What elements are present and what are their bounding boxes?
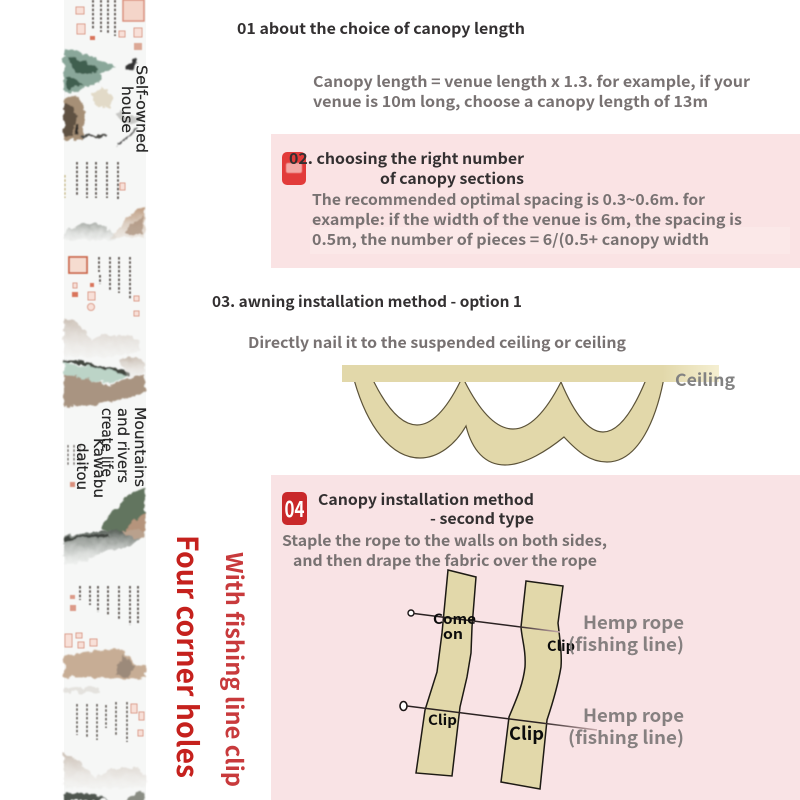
heading 04: Canopy installation method <box>318 489 534 510</box>
body text 01: Canopy length = venue length x 1.3. for example, if your <box>313 71 750 92</box>
rotated label: mountains and rivers: Kawabu <box>90 438 108 498</box>
label: hemp rope upper: (fishing line) <box>568 631 684 657</box>
mountain range 2 <box>64 317 145 407</box>
label: ceiling: Ceiling <box>675 366 735 391</box>
icon: red badge 04: 04 <box>284 492 305 524</box>
body text 01: venue is 10m long, choose a canopy length of 13m <box>313 91 708 112</box>
body text 02 <box>312 189 742 250</box>
label: clip lower left: Clip <box>428 710 457 730</box>
label: hemp rope lower: Hemp rope <box>583 702 684 728</box>
calligraphy block 2 <box>65 162 125 200</box>
rotated label: mountains and rivers: Mountains <box>131 407 149 487</box>
calligraphy block 4 <box>68 445 80 487</box>
rotated heading: four corner holes: Four corner holes <box>168 535 210 778</box>
section 01: canopy length <box>237 18 750 112</box>
calligraphy block 6 with seals <box>77 702 144 742</box>
label: hemp rope upper <box>568 609 684 657</box>
body text 04 <box>282 530 607 571</box>
rotated label: self-owned house <box>118 65 150 153</box>
body text 02: 0.5m, the number of pieces = 6/(0.5+ canopy width <box>312 229 709 250</box>
heading 02 <box>289 148 524 189</box>
label: hemp rope upper: Hemp rope <box>583 609 684 635</box>
panel: section 04 installation second type <box>271 475 800 800</box>
heading 04: - second type <box>430 508 534 529</box>
body text 01 <box>313 71 750 112</box>
mountain range 5 <box>64 752 145 800</box>
panel: painted landscape scroll strip <box>64 0 146 800</box>
pine tree, rock and pavilion <box>64 48 140 144</box>
icon: red badge 02 <box>282 152 306 185</box>
body text 02: example: if the width of the venue is 6m, the spacing is <box>312 209 742 230</box>
diagram: ceiling bar with scalloped canopy <box>342 365 735 465</box>
calligraphy block 5 with seals <box>65 586 138 648</box>
heading 02: 02. choosing the right number <box>289 148 524 169</box>
rotated label: mountains and rivers: create life <box>98 408 116 477</box>
rotated label: self-owned house: house <box>118 86 136 133</box>
diagram: upper rope line <box>408 610 560 632</box>
calligraphy block 3 with seals <box>69 257 139 316</box>
rotated label: self-owned house: Self-owned <box>132 65 150 153</box>
label: come on: on <box>443 624 463 644</box>
section 03: installation option 1 <box>212 291 735 465</box>
diagram: fabric strip left <box>416 570 476 776</box>
body text 04: Staple the rope to the walls on both sides, <box>282 530 607 551</box>
calligraphy block 1 with seals <box>76 0 144 50</box>
rotated label: mountains and rivers: and rivers <box>114 408 132 483</box>
rotated label: mountains and rivers: daitou <box>73 443 91 490</box>
diagram: fabric strip right <box>501 581 563 789</box>
heading 02: of canopy sections <box>380 168 524 189</box>
heading 03: 03. awning installation method - option 1 <box>212 291 522 312</box>
label: clip upper right: Clip <box>547 636 575 656</box>
panel: section 02 number of sections <box>271 134 800 268</box>
rotated heading: with fishing line clip: With fishing line clip <box>219 552 253 787</box>
heading 04 <box>318 489 534 529</box>
label: hemp rope lower: (fishing line) <box>568 724 684 750</box>
diagram: lower rope line <box>400 702 597 730</box>
body text 02: The recommended optimal spacing is 0.3~0.6m. for <box>312 189 705 210</box>
pine grove and mountain range 3 <box>64 488 145 564</box>
label: hemp rope lower <box>568 702 684 750</box>
body text 04: and then drape the fabric over the rope <box>293 550 597 571</box>
rotated label: mountains and rivers <box>73 407 149 498</box>
mountain range 4 <box>64 648 145 690</box>
body text 03: Directly nail it to the suspended ceiling or ceiling <box>248 332 626 353</box>
mountain range 1 <box>64 207 145 240</box>
label: come on: Come <box>433 609 476 629</box>
label: clip lower right: Clip <box>509 720 544 746</box>
heading 01: 01 about the choice of canopy length <box>237 18 525 39</box>
label: come on <box>433 609 476 644</box>
